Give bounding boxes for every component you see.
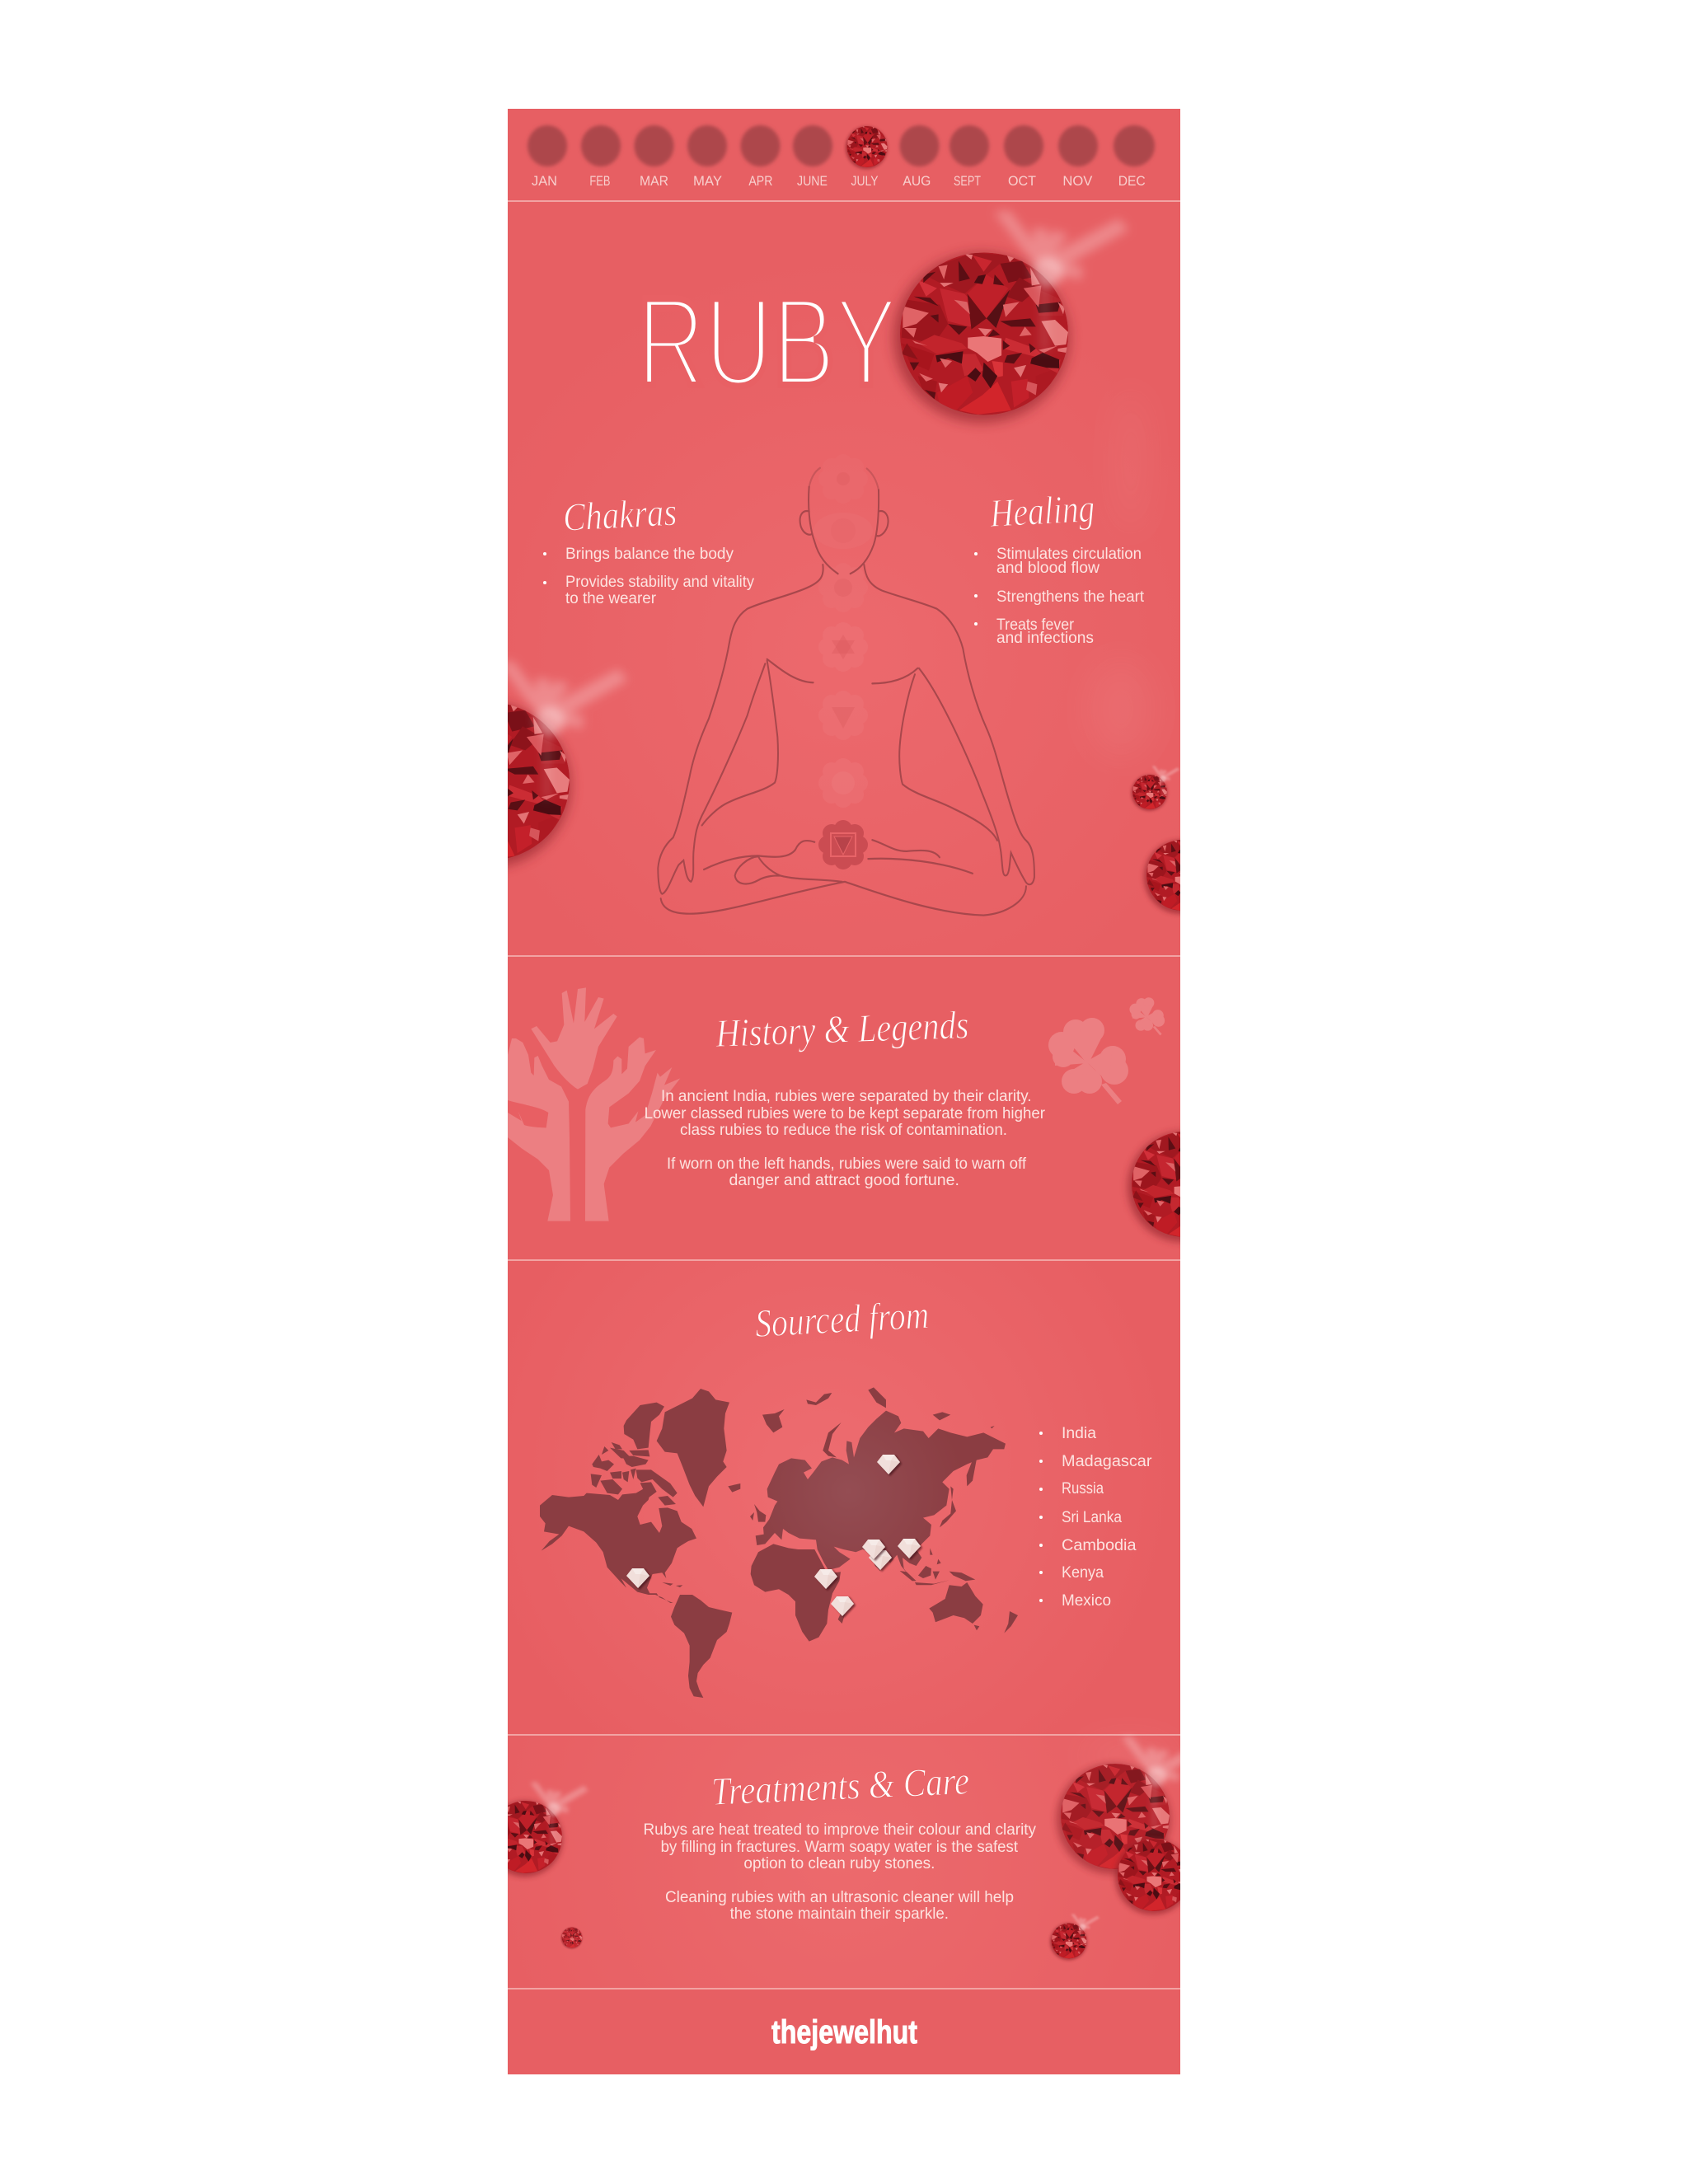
- treatments text: Rubys are heat treated to improve their colour and clarity: [643, 1821, 1036, 1839]
- body outline: [658, 468, 1034, 916]
- healing list: Treats fever: [996, 616, 1075, 634]
- month selector: [528, 125, 1155, 189]
- month labels: NOV: [1062, 173, 1093, 189]
- healing list: Stimulates circulation: [996, 546, 1142, 563]
- month labels: DEC: [1118, 173, 1146, 189]
- history text: In ancient India, rubies were separated by their clarity.: [661, 1088, 1032, 1105]
- icon: left ruby: [401, 661, 628, 869]
- source country list: Kenya: [1062, 1564, 1104, 1582]
- title: RUBY: [637, 272, 898, 412]
- treatments text: option to clean ruby stones.: [743, 1855, 935, 1872]
- panel: sourced from: [540, 1293, 1152, 1698]
- icon: tiny left ruby: [560, 1927, 583, 1949]
- month gem placeholders: [528, 125, 1155, 166]
- world map: [540, 1387, 1018, 1698]
- treatments text: Cleaning rubies with an ultrasonic cleaner will help: [665, 1889, 1014, 1906]
- history text: [645, 1088, 1046, 1189]
- source country list: Madagascar: [1062, 1453, 1152, 1470]
- history text: Lower classed rubies were to be kept separate from higher: [645, 1105, 1046, 1122]
- icon: right large ruby: [1057, 1736, 1209, 1874]
- month labels: SEPT: [954, 173, 981, 189]
- panel: chakras: [543, 500, 754, 603]
- month labels: AUG: [903, 173, 931, 189]
- heading: treatments and care: Treatments & Care: [710, 1759, 970, 1814]
- healing list: Strengthens the heart: [996, 588, 1145, 606]
- icon: july ruby: [846, 126, 888, 170]
- history text: danger and attract good fortune.: [729, 1172, 959, 1189]
- healing list: [974, 546, 1145, 647]
- logo: thejewelhut: [771, 2014, 917, 2050]
- month labels: FEB: [589, 173, 610, 189]
- icon: right edge ruby: [1144, 840, 1218, 914]
- month labels: OCT: [1008, 173, 1036, 189]
- map pins: [626, 1455, 922, 1618]
- icon: right front ruby: [1114, 1839, 1191, 1915]
- panel: history and legends: [508, 987, 1275, 1242]
- panel: healing: [974, 486, 1145, 647]
- month labels: MAR: [640, 173, 668, 189]
- icon: small right ruby: [1050, 1914, 1100, 1961]
- history text: If worn on the left hands, rubies were said to warn off: [667, 1155, 1027, 1173]
- map: africa eurasia oceania: [750, 1387, 1018, 1642]
- heading: chakras: Chakras: [562, 490, 678, 540]
- seated figure with chakras: [658, 454, 1034, 916]
- icon: left ruby: [486, 1782, 588, 1877]
- treatments text: the stone maintain their sparkle.: [730, 1905, 949, 1923]
- chakras list: to the wearer: [565, 590, 657, 607]
- icon: small right ruby: [1131, 766, 1179, 811]
- heading: healing: Healing: [988, 486, 1095, 536]
- month labels: APR: [748, 173, 772, 189]
- icon: history ruby: [1128, 1104, 1275, 1242]
- source country list: Mexico: [1062, 1592, 1111, 1610]
- icon: hands: [508, 987, 680, 1221]
- source country list: Cambodia: [1062, 1537, 1137, 1554]
- heading: sourced from: Sourced from: [754, 1293, 930, 1346]
- heading: history and legends: History & Legends: [715, 1003, 969, 1056]
- source country list: [1039, 1425, 1152, 1610]
- healing list: and blood flow: [996, 560, 1100, 577]
- chakras list: Provides stability and vitality: [565, 574, 754, 591]
- treatments text: by filling in fractures. Warm soapy water is the safest: [661, 1839, 1019, 1856]
- source country list: India: [1062, 1425, 1096, 1442]
- panel: treatments and care: [486, 1736, 1209, 1961]
- month labels: JAN: [532, 173, 557, 189]
- chakras list: [543, 546, 754, 607]
- infographic panel: [508, 109, 1180, 2074]
- month labels: [532, 176, 1145, 185]
- month labels: JULY: [851, 173, 879, 189]
- healing list: and infections: [996, 630, 1094, 647]
- map: americas and greenland: [540, 1389, 740, 1698]
- chakras list: Brings balance the body: [565, 546, 734, 563]
- treatments text: [643, 1821, 1036, 1923]
- icon: large ruby: [893, 210, 1128, 423]
- month labels: MAY: [693, 173, 722, 189]
- icon: four-leaf clovers: [1048, 997, 1165, 1104]
- chakra symbols: [818, 640, 868, 869]
- month labels: JUNE: [797, 173, 828, 189]
- source country list: Sri Lanka: [1062, 1509, 1122, 1526]
- history text: class rubies to reduce the risk of contamination.: [680, 1122, 1007, 1139]
- source country list: Russia: [1062, 1480, 1104, 1497]
